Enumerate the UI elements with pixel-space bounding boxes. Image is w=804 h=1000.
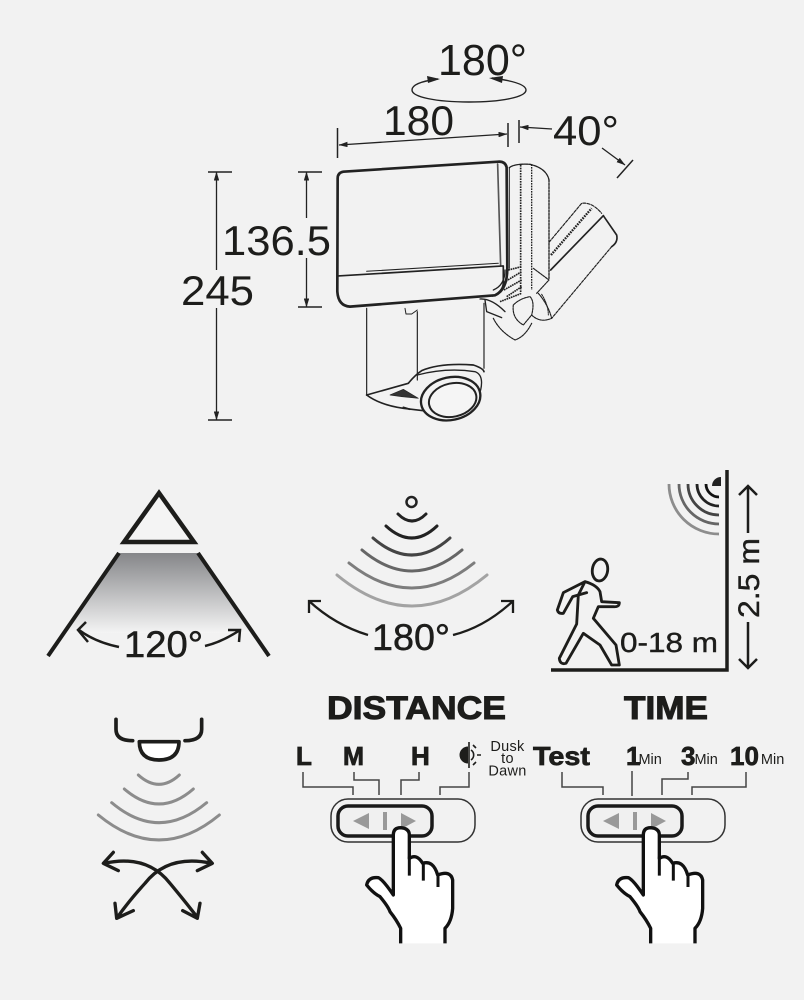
icon: sensor dot [406,497,416,507]
arrow: height [739,486,757,668]
label: 180 degrees: 180° [372,617,450,658]
panel: distance switch [296,690,527,943]
icon: pointing hand [617,828,703,943]
label: height 2.5 m: 2.5 m [733,538,766,618]
icon: lamp triangle [124,493,194,542]
label: 3 Min: 3 [681,741,695,771]
icon: pointing hand [367,828,453,943]
width dimension: 180: 180 [383,97,454,144]
icon: walking person [557,558,619,665]
height dimension: 136.5 [222,172,331,307]
label: M: M [343,741,364,771]
arrows: swivel directions [103,852,212,918]
device: lower sensor and camera body [367,303,484,426]
label: 1 Min: 1 [626,741,640,771]
tilt dimension: 40 degrees [519,107,633,178]
label: 1 Min: Min [638,752,662,768]
slider track [331,799,475,842]
beam edge lines [48,553,269,656]
panel: 120 degree light beam [48,493,269,665]
label: Dusk to Dawn: Dusk [490,739,525,755]
arrows: beam spread [78,622,240,647]
label: 120 degrees: 120° [124,624,203,665]
icon: sensor dome [139,742,179,760]
heading: TIME: TIME [624,690,708,726]
slider track [581,799,725,842]
panel: adjustable sensor head [98,719,219,918]
device: tilted arm shown dashed [480,164,617,340]
panel: time switch [533,690,784,943]
slider knob [588,806,682,836]
height dimension: 245: 245 [181,267,254,314]
arrows: detection spread [309,601,513,635]
detection waves [337,514,487,606]
label: Test: Test [533,741,590,771]
slider arrows [353,812,416,830]
floodlight device line drawing [337,162,617,426]
label: 10 Min: 10 [730,741,759,771]
sensor waves [98,775,219,840]
label: range 0-18 m: 0-18 m [620,627,718,658]
beam gradient [64,553,253,633]
tilt dimension: 40 degrees: 40° [553,107,619,154]
label: Dusk to Dawn: to [501,751,514,767]
leader lines [303,772,469,795]
rotation label: 180 degrees: 180° [438,36,527,85]
label: 10 Min: Min [761,752,784,768]
heading: DISTANCE: DISTANCE [327,690,506,726]
label: Dusk to Dawn: Dawn [488,764,527,780]
icon: wall sensor waves [669,477,721,534]
label: 3 Min: Min [694,752,718,768]
device: lamp panel [337,162,507,307]
panel: mounting height and range [551,470,766,670]
rotation label: 180 degrees [412,36,527,102]
icon: dusk to dawn sun [460,742,481,768]
slider arrows [603,812,666,830]
leader lines [562,771,746,796]
slider knob [338,806,432,836]
height dimension: 136.5: 136.5 [222,217,331,264]
width dimension: 180 [338,97,508,158]
label: H: H [411,741,430,771]
wall and floor [551,470,727,670]
label: L: L [296,741,312,771]
panel: 180 degree detection [309,497,513,658]
icon: sensor head brackets [116,719,202,741]
